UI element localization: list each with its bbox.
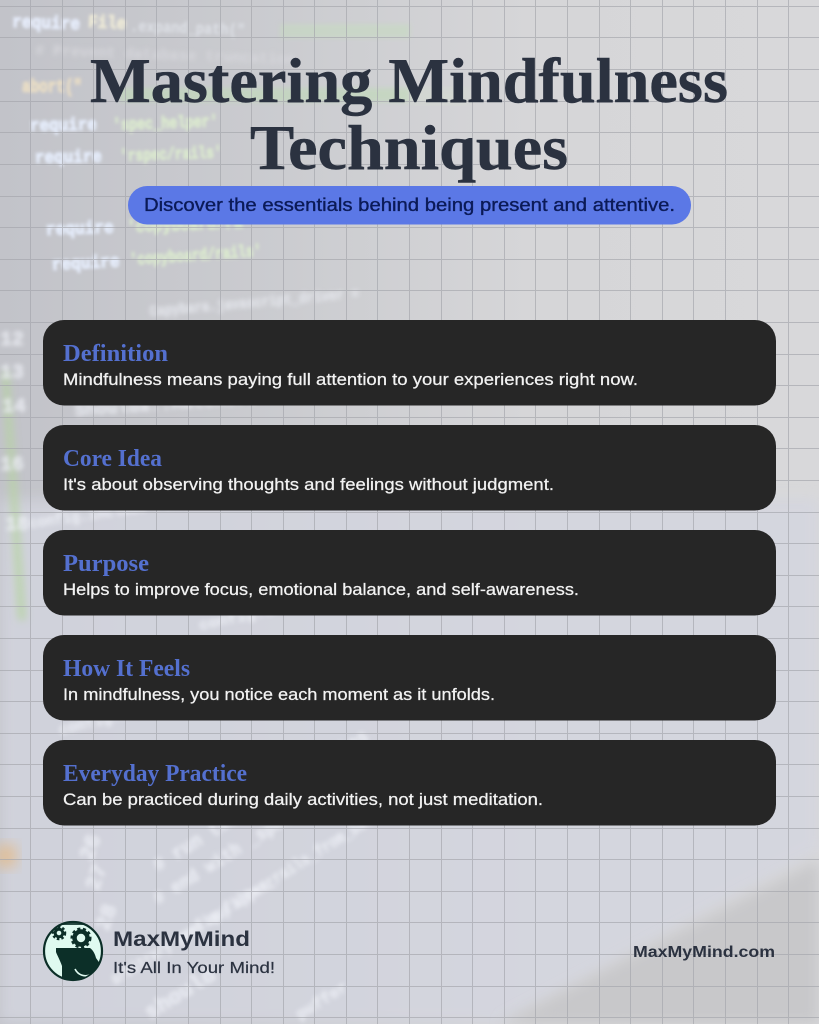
background: blurred code photo: arbitrary gems may appear — [108, 873, 279, 990]
heading: Everyday Practice: Everyday Practice — [63, 761, 247, 787]
heading: Definition: Definition — [63, 341, 168, 367]
card: Purpose — [43, 530, 776, 616]
background: blurred code photo: 12 — [0, 329, 24, 352]
title: Mastering Mindfulness — [90, 46, 728, 116]
background: blurred code photo: # run twice. it retries — [150, 726, 374, 878]
text: Purpose body: Helps to improve focus, emotional balance, and self-awareness. — [63, 581, 579, 599]
background: blurred code photo: puffer — [293, 978, 352, 1024]
background: blurred code photo: require — [35, 148, 102, 169]
background: blurred code photo: config.include FactoryBot::Syntax — [28, 476, 308, 533]
background: blurred code photo: 'rspec/rails' — [120, 144, 222, 167]
background: blurred code photo: Capybara.javascript_driver = — [149, 286, 360, 321]
title — [90, 46, 728, 183]
background: blurred code photo: 'copyboard/rails' — [129, 243, 262, 271]
background: blurred code photo: config.filter_rails_from_back — [171, 807, 385, 950]
title: Techniques — [250, 113, 568, 183]
background: blurred code photo: File — [88, 13, 127, 35]
background: blurred code photo: 'spec_helper' — [113, 113, 218, 136]
background: blurred code photo: # end with _spec.rb. Run — [150, 764, 365, 910]
background: blurred code photo: 27 — [81, 861, 114, 894]
background: blurred code photo: 13 — [0, 362, 24, 385]
background: blurred code photo: abort(" — [22, 78, 82, 98]
background: blurred code photo: Shoulda::Matchers — [74, 389, 259, 422]
website: MaxMyMind.com — [633, 944, 775, 961]
background: blurred code photo: require — [51, 252, 120, 276]
text: How It Feels body: In mindfulness, you notice each moment as it unfolds. — [63, 686, 495, 704]
brand name: MaxMyMind — [113, 928, 250, 951]
card: Definition — [43, 320, 776, 406]
text: Core Idea body: It's about observing thoughts and feelings without judgment. — [63, 476, 554, 494]
card: How It Feels — [43, 635, 776, 720]
background: blurred code photo: require — [46, 219, 114, 241]
card: Core Idea — [43, 425, 776, 510]
background: blurred code photo: 'copyboard/ra' — [127, 215, 252, 238]
icon: MaxMyMind logo — [44, 918, 102, 982]
background: blurred code photo: 14 — [2, 396, 26, 419]
background: blurred code photo: 28 — [91, 901, 124, 934]
text: Everyday Practice body: Can be practiced during daily activities, not just meditation. — [63, 791, 543, 809]
subtitle pill: Discover the essentials behind being present and attentive. — [144, 195, 675, 215]
background: blurred code photo: config.before(:each) do |example| — [57, 650, 352, 740]
background: blurred code photo: require — [30, 116, 97, 137]
heading: Purpose: Purpose — [63, 551, 149, 577]
background: blurred code photo: 16 — [0, 454, 24, 477]
background: blurred code photo: require — [12, 13, 80, 35]
background: blurred code photo: 26 — [75, 831, 108, 864]
background: blurred code photo: 18 — [5, 514, 29, 537]
background: blurred code photo: # Prevent database truncation — [35, 42, 295, 69]
text: Definition body: Mindfulness means paying full attention to your experiences right now. — [63, 371, 638, 389]
heading: How It Feels: How It Feels — [63, 656, 190, 682]
background: blurred code photo: config.additional_settings — [198, 566, 446, 635]
background: blurred code photo: .expand_path(" — [130, 18, 245, 40]
tagline: It's All In Your Mind! — [113, 960, 275, 977]
card: Everyday Practice — [43, 740, 776, 826]
heading: Core Idea: Core Idea — [63, 446, 162, 472]
subtitle pill — [128, 186, 691, 224]
